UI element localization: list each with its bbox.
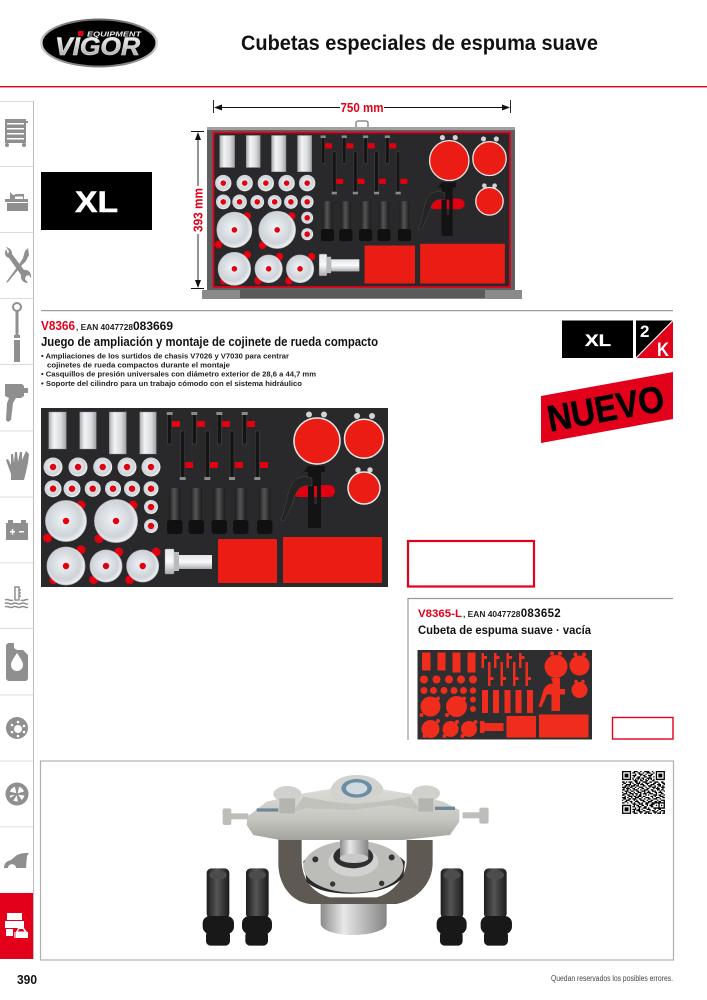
product heading V8366 — [41, 319, 173, 333]
XL badge small — [562, 320, 633, 358]
icon: car door — [4, 853, 29, 868]
XL size badge: XL — [75, 186, 118, 219]
divider above product — [41, 310, 673, 311]
heading V8365-L: 083652 — [521, 608, 561, 620]
page title: Cubetas especiales de espuma suave — [241, 32, 598, 55]
drawer with dimensions — [191, 100, 522, 299]
2K badge: 2 — [640, 322, 649, 341]
product heading V8366: , EAN 4047728 — [76, 323, 134, 332]
heading V8365-L: V8365-L — [418, 608, 462, 620]
XL size badge — [41, 172, 152, 230]
disclaimer: Quedan reservados los posibles errores. — [551, 974, 673, 983]
drawer frame — [202, 121, 522, 299]
empty foam tray — [418, 650, 592, 740]
dimension: width 750 mm — [214, 100, 510, 115]
bullet list: • Casquillos de presión universales con diámetro exterior de 28,6 a 44,7 mm — [41, 370, 316, 378]
heading V8365-L — [418, 608, 561, 620]
icon: gloves — [6, 451, 29, 480]
XL badge small: XL — [585, 331, 611, 350]
dark bracket — [278, 838, 433, 904]
panel: V8365-L — [408, 598, 673, 740]
black sleeves — [203, 868, 512, 946]
bullet list: cojinetes de rueda compactos durante el montaje — [47, 360, 230, 370]
bullet list: • Ampliaciones de los surtidos de chasis V7026 y V7030 para centrar — [41, 352, 289, 360]
dimension: width 750 mm: 750 mm — [340, 101, 384, 115]
icon: brake disc — [6, 717, 28, 739]
logo: Vigor Equipment — [40, 18, 158, 68]
empty price box — [408, 541, 534, 586]
bullet list: • Soporte del cilindro para un trabajo cómodo con el sistema hidráulico — [41, 379, 302, 388]
icon: battery — [6, 520, 28, 540]
sidebar navigation — [0, 101, 34, 959]
logo: Vigor Equipment: VIGOR — [55, 33, 140, 61]
pins — [273, 785, 440, 802]
NUEVO banner: NUEVO — [544, 378, 667, 440]
small price box — [612, 718, 673, 739]
active tab: vehicles — [0, 893, 33, 959]
logo: Vigor Equipment: EQUIPMENT — [87, 30, 143, 38]
title: Cubeta de espuma suave · vacía — [418, 625, 592, 637]
bullet list — [41, 352, 316, 388]
dimension: height 393 mm — [191, 132, 206, 288]
2K badge — [636, 320, 673, 361]
product heading V8366: 083669 — [133, 319, 173, 333]
product title: Juego de ampliación y montaje de cojinete de rueda compacto — [41, 335, 378, 349]
icon: wrench and screwdriver — [5, 247, 31, 283]
heading V8365-L: , EAN 4047728 — [463, 610, 521, 619]
icon: wheel — [6, 782, 28, 806]
center nut — [331, 775, 383, 802]
icon: ratchet — [13, 303, 21, 362]
icon: tool cabinet — [5, 119, 28, 147]
2K badge: K — [657, 340, 669, 361]
icon: coolant temperature — [5, 587, 28, 608]
QR code — [622, 772, 665, 813]
header red rule — [0, 86, 707, 87]
product heading V8366: V8366 — [41, 319, 75, 333]
icon: toolbox — [5, 192, 28, 211]
panel: application photo — [40, 761, 674, 960]
page number: 390 — [17, 973, 37, 987]
icon: impact gun — [5, 384, 28, 422]
cylinder base — [321, 902, 387, 935]
side screws — [223, 808, 489, 825]
product photo: bearing press tool — [203, 775, 512, 946]
icon: oil canister — [6, 643, 28, 681]
drawer foam tray — [213, 132, 510, 287]
dimension: height 393 mm: 393 mm — [192, 188, 206, 232]
product photo: foam tray with tools — [41, 408, 388, 587]
crossbeam — [247, 788, 459, 840]
wheel hub flange — [303, 845, 405, 894]
